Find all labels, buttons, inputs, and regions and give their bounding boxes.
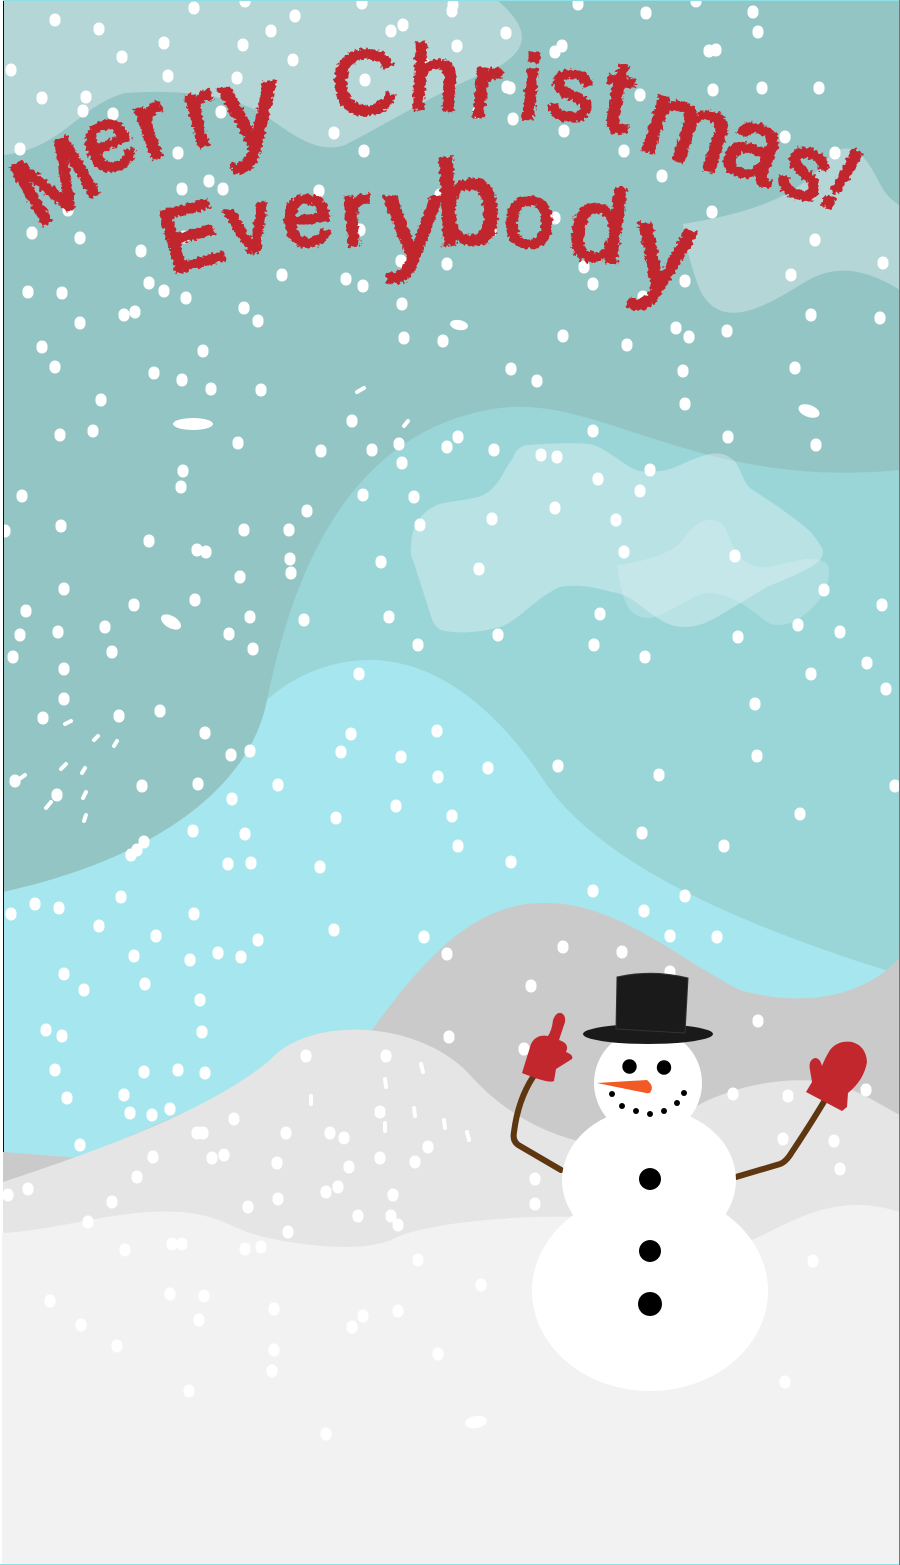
title line 2: Everybody: b — [432, 136, 504, 271]
snowman: right arm — [736, 1100, 825, 1177]
snowman: smile — [609, 1090, 687, 1117]
snowman: right mitten — [806, 1042, 867, 1111]
cloud: middle small — [617, 520, 829, 625]
snowman — [514, 973, 867, 1391]
ground: grey hill — [3, 903, 900, 1565]
ground: light grey drift — [3, 1030, 900, 1565]
title: Merry Christmas! Everybody — [0, 28, 877, 318]
title line 1: Merry Christmas!: C — [329, 32, 399, 135]
title line 2: Everybody: e — [277, 162, 337, 267]
snowman: buttons — [638, 1168, 662, 1316]
title line 1: Merry Christmas!: i — [516, 37, 546, 139]
snowman: head — [594, 1029, 702, 1137]
title line 1: Merry Christmas!: t — [595, 39, 642, 155]
title line 1: Merry Christmas!: ! — [805, 131, 877, 230]
snowman: eyes — [622, 1059, 671, 1075]
cloud: middle large — [411, 443, 823, 632]
snowman: body middle — [562, 1108, 736, 1252]
title line 2: Everybody: E — [149, 181, 233, 293]
title line 1: Merry Christmas!: y — [212, 40, 288, 175]
title line 1: Merry Christmas!: a — [709, 83, 803, 207]
snowman: left arm — [514, 1077, 561, 1170]
title line 2: Everybody: d — [563, 165, 635, 286]
snowman: left mitten — [522, 1013, 572, 1082]
snowman: body bottom — [532, 1191, 768, 1391]
title line 1: Merry Christmas!: s — [543, 37, 601, 142]
title line 1: Merry Christmas!: s — [765, 113, 848, 223]
title line 2: Everybody: o — [502, 165, 557, 268]
background: mid teal hill — [3, 407, 900, 1100]
title line 1: Merry Christmas!: r — [466, 35, 506, 138]
snowman: top hat — [583, 973, 713, 1044]
title line 1: Merry Christmas!: r — [171, 57, 229, 168]
snowman: carrot nose — [597, 1080, 652, 1093]
title line 2: Everybody: v — [217, 172, 280, 275]
title line 1: Merry Christmas!: m — [629, 58, 749, 196]
ground: foreground snow — [2, 1205, 900, 1565]
title line 2: Everybody: r — [336, 163, 376, 266]
background: light aqua hill — [3, 660, 900, 1250]
title line 1: Merry Christmas!: r — [118, 69, 184, 181]
title line 1: Merry Christmas!: h — [407, 28, 462, 131]
cloud: top right — [683, 148, 900, 313]
title line 2: Everybody: y — [625, 182, 704, 318]
title line 1: Merry Christmas!: e — [63, 84, 151, 196]
cloud: top left — [3, 0, 522, 155]
title line 2: Everybody: y — [384, 155, 442, 283]
